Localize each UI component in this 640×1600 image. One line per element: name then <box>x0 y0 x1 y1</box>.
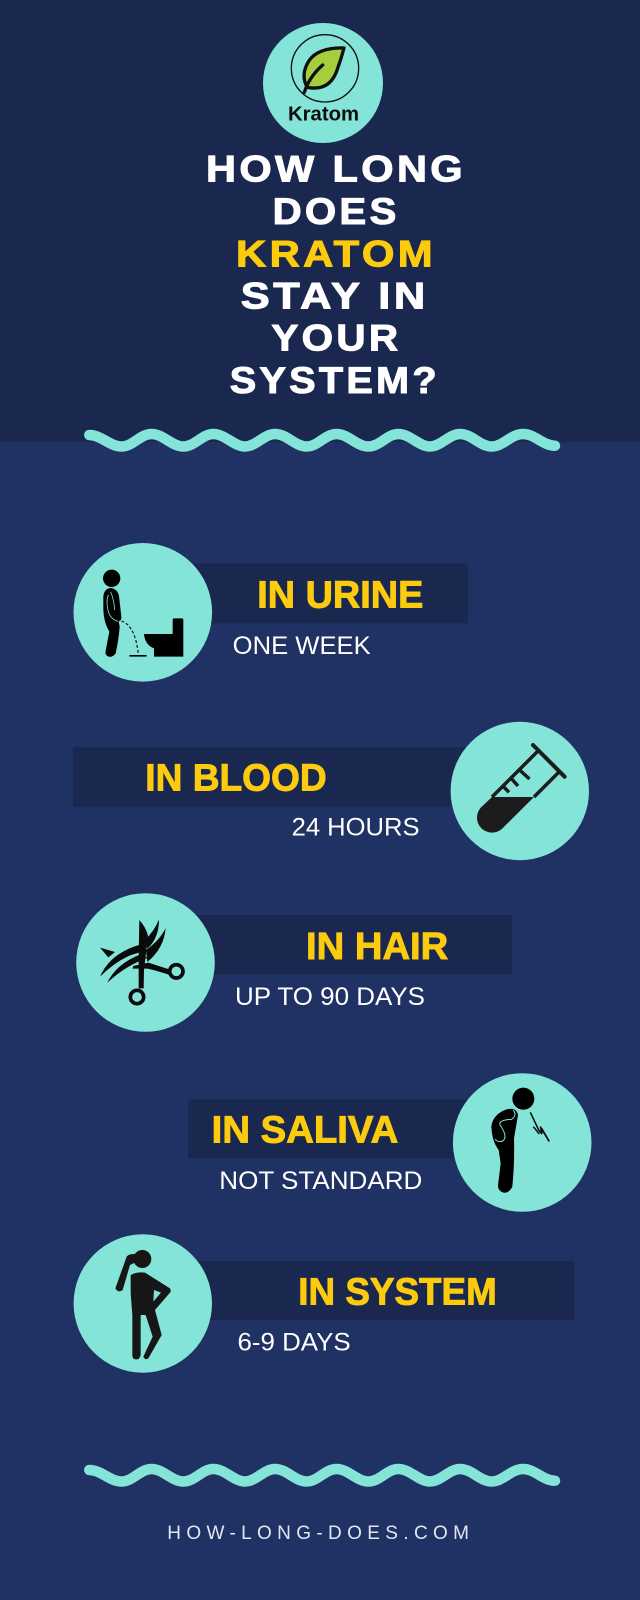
heading bar: in system <box>140 1261 574 1320</box>
title: HOW LONG <box>206 149 466 190</box>
title: YOUR <box>271 318 401 359</box>
top wave divider <box>89 434 555 446</box>
icon: person spitting <box>453 1073 592 1212</box>
title: KRATOM <box>236 234 436 275</box>
icon: test tube <box>451 722 589 860</box>
panel: in blood <box>73 722 589 860</box>
title <box>206 149 466 401</box>
logo badge <box>263 23 383 143</box>
value: 24 hours: 24 HOURS <box>292 814 420 842</box>
panel: in saliva <box>188 1073 592 1212</box>
title: STAY IN <box>241 275 429 316</box>
bottom wave divider <box>89 1469 555 1482</box>
value: 6-9 days: 6-9 DAYS <box>238 1329 351 1357</box>
panel: in system <box>74 1234 574 1373</box>
heading: in saliva: IN SALIVA <box>212 1110 398 1152</box>
value: not standard: NOT STANDARD <box>219 1167 422 1195</box>
title: SYSTEM? <box>230 360 440 401</box>
heading bar: in saliva <box>188 1099 528 1158</box>
heading bar: in blood <box>73 747 523 807</box>
logo badge: Kratom <box>288 104 359 126</box>
heading: in hair: IN HAIR <box>306 926 448 968</box>
heading: in urine: IN URINE <box>257 575 423 617</box>
icon: standing person with hand on head <box>74 1234 212 1373</box>
footer website: HOW-LONG-DOES.COM <box>167 1523 469 1544</box>
heading: in system: IN SYSTEM <box>298 1271 497 1313</box>
value: up to 90 days: UP TO 90 DAYS <box>235 983 425 1011</box>
title: DOES <box>273 191 400 232</box>
heading bar: in hair <box>145 915 512 974</box>
heading bar: in urine <box>140 563 468 623</box>
heading: in blood: IN BLOOD <box>145 758 327 800</box>
icon: scissors cutting hair <box>76 893 215 1032</box>
panel: in hair <box>76 893 512 1032</box>
icon: person urinating at toilet <box>74 543 212 682</box>
header band <box>0 0 640 442</box>
value: one week: ONE WEEK <box>233 632 371 660</box>
panel: in urine <box>74 543 468 682</box>
